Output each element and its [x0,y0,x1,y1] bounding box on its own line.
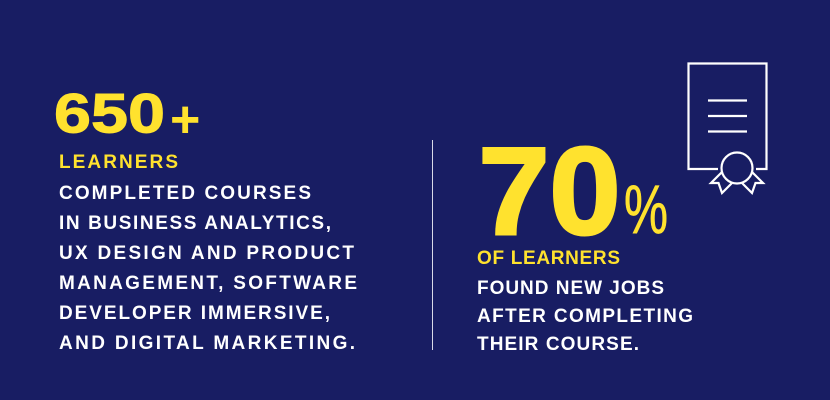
jobs description: AFTER COMPLETING [477,306,693,327]
courses description: DEVELOPER IMMERSIVE, [59,303,330,324]
courses description: AND DIGITAL MARKETING. [59,333,355,354]
panel: 650+ learners statistic [54,82,357,354]
jobs description: THEIR COURSE. [477,334,639,355]
courses description: IN BUSINESS ANALYTICS, [59,213,331,234]
jobs description: FOUND NEW JOBS [477,278,664,299]
courses description: UX DESIGN AND PRODUCT [59,243,354,264]
courses description: COMPLETED COURSES [59,183,311,204]
percent sign: % [624,171,668,248]
panel: 70% found new jobs statistic [477,123,693,355]
of learners label: OF LEARNERS [477,248,620,269]
plus sign: + [170,91,200,149]
big number 650: 650 [54,82,165,144]
learners label: LEARNERS [59,152,178,173]
courses description [59,183,357,354]
courses description: MANAGEMENT, SOFTWARE [59,273,357,294]
jobs description [477,278,693,355]
icon: certificate with ribbon seal [688,64,766,193]
big number 70: 70 [478,123,620,261]
